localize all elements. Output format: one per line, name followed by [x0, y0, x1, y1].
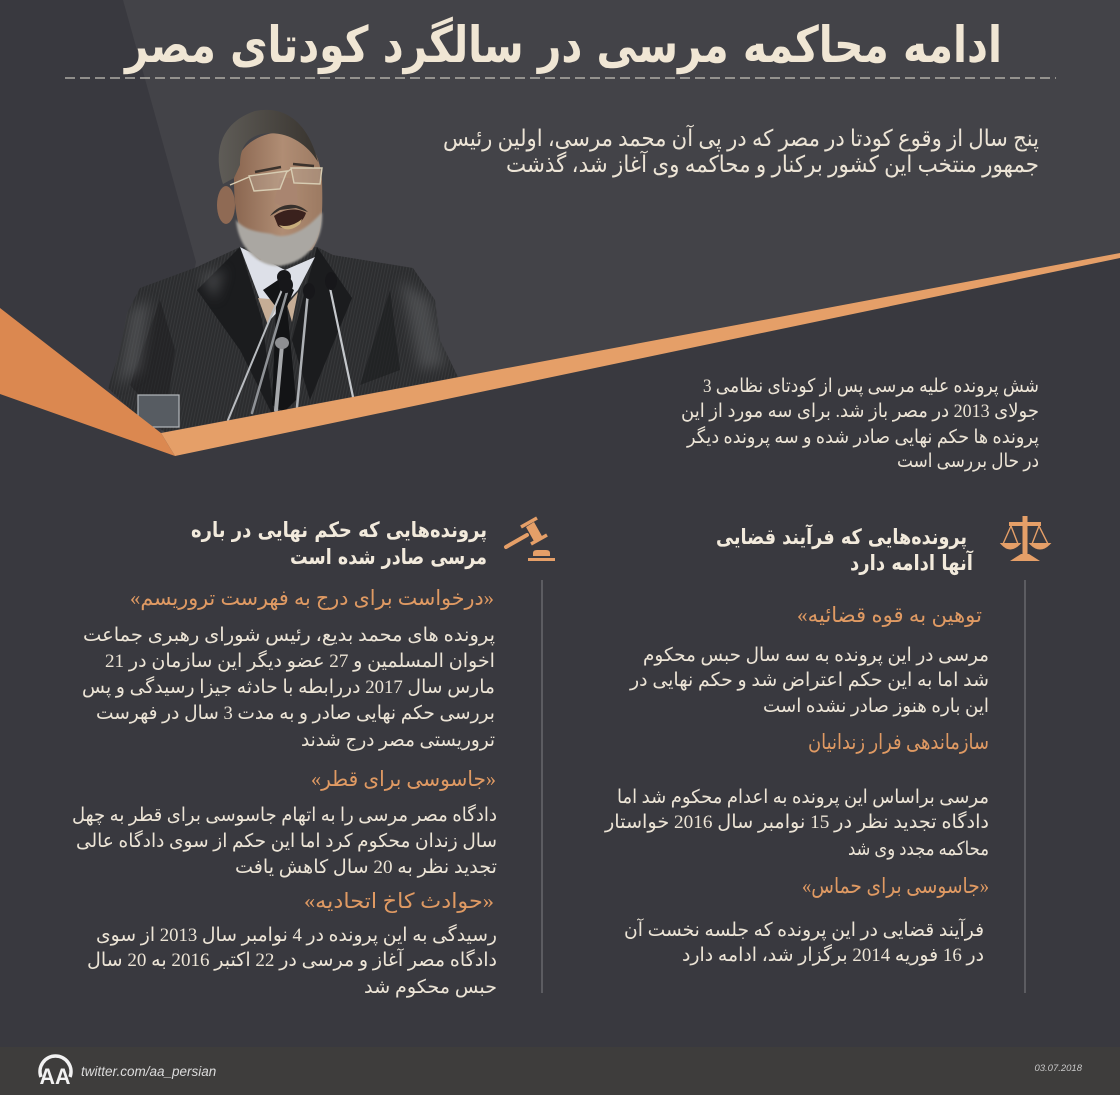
case: terrorism list: «درخواست برای درج به فهرست تروریسم» — [130, 586, 494, 611]
twitter handle: twitter.com/aa_persian — [81, 1064, 216, 1079]
case: insulting judiciary — [629, 603, 989, 717]
right column heading: آنها ادامه دارد — [850, 550, 974, 575]
mouth — [274, 210, 306, 228]
case: palace events: رسیدگی به این پرونده در 4 نوامبر سال 2013 از سوی — [96, 923, 497, 946]
intro text: پنج سال از وقوع کودتا در مصر که در پی آن محمد مرسی، اولین رئیس — [443, 124, 1039, 152]
case: palace events — [87, 889, 497, 998]
case: spying for Qatar: سال زندان محکوم کرد اما این حکم از سوی دادگاه عالی — [76, 829, 497, 852]
nose shadow — [274, 178, 298, 208]
hair — [219, 110, 318, 184]
left column: finalized cases — [72, 586, 497, 998]
glasses — [230, 168, 322, 191]
microphone heads — [275, 270, 337, 349]
summary text: جولای 2013 در مصر باز شد. برای سه مورد از این — [681, 401, 1039, 422]
orange left wedge — [0, 308, 175, 456]
intro text: جمهور منتخب این کشور برکنار و محاکمه وی آغاز شد، گذشت — [506, 150, 1039, 178]
case: spying for Hamas: فرآیند قضایی در این پرونده که جلسه نخست آن — [624, 917, 984, 941]
date: 03.07.2018 — [1034, 1063, 1083, 1074]
case: palace events: «حوادث کاخ اتحادیه» — [304, 889, 494, 913]
eyebrows — [255, 164, 314, 172]
case: insulting judiciary: شد اما به این حکم اعتراض شد و حکم نهایی در — [629, 670, 989, 691]
case: terrorism list: اخوان المسلمین و 27 عضو دیگر این سازمان در 21 — [105, 649, 495, 672]
right column heading — [716, 524, 974, 575]
summary text: شش پرونده علیه مرسی پس از کودتای نظامی 3 — [703, 376, 1039, 397]
icon: gavel — [506, 518, 555, 561]
left column heading — [191, 518, 487, 569]
case: terrorism list: مارس سال 2017 دررابطه با حادثه جیزا رسیدگی و پس — [82, 675, 495, 698]
case: spying for Qatar: تجدید نظر به 20 سال کاهش یافت — [235, 857, 497, 878]
beard — [236, 212, 322, 266]
intro text — [443, 124, 1039, 178]
suit highlights — [118, 270, 445, 385]
case: prison escape: مرسی براساس این پرونده به اعدام محکوم شد اما — [617, 787, 989, 808]
shirt — [240, 247, 315, 320]
summary text: در حال بررسی است — [897, 451, 1039, 472]
right column: ongoing cases — [604, 603, 989, 966]
tie — [263, 280, 296, 412]
suit lapels — [130, 247, 400, 425]
ear — [217, 186, 235, 224]
footer bar — [0, 1047, 1120, 1095]
case: insulting judiciary: مرسی در این پرونده به سه سال حبس محکوم — [643, 645, 989, 666]
case: terrorism list: تروریستی مصر درج شدند — [301, 730, 495, 751]
case: spying for Hamas — [624, 874, 989, 966]
case: prison escape: دادگاه تجدید نظر در 15 نوامبر سال 2016 خواستار — [604, 810, 989, 833]
moustache — [270, 205, 308, 216]
right column heading: پرونده‌هایی که فرآیند قضایی — [716, 524, 967, 549]
case: spying for Qatar — [72, 767, 497, 878]
case: spying for Qatar: «جاسوسی برای قطر» — [311, 767, 496, 791]
case: prison escape: سازماندهی فرار زندانیان — [808, 730, 989, 754]
case: prison escape — [604, 730, 989, 860]
case: spying for Qatar: دادگاه مصر مرسی را به اتهام جاسوسی برای قطر به چهل — [72, 803, 497, 826]
lower shirt — [258, 298, 280, 325]
summary text: پرونده ها حکم نهایی صادر شده و سه پرونده دیگر — [686, 425, 1039, 448]
case: spying for Hamas: «جاسوسی برای حماس» — [802, 874, 989, 898]
orange strip — [161, 253, 1120, 456]
neck and face — [234, 132, 322, 260]
case: palace events: حبس محکوم شد — [364, 977, 497, 998]
summary text — [681, 376, 1039, 472]
left column heading: پرونده‌هایی که حکم نهایی در باره — [191, 518, 487, 542]
case: palace events: دادگاه مصر آغاز و مرسی در 22 اکتبر 2016 به 20 سال — [87, 947, 497, 971]
case: terrorism list — [82, 586, 495, 751]
case: insulting judiciary: توهین به قوه قضائیه» — [797, 603, 982, 627]
case: terrorism list: بررسی حکم نهایی صادر و به مدت 3 سال در فهرست — [96, 703, 495, 724]
left column heading: مرسی صادر شده است — [290, 545, 487, 569]
case: spying for Hamas: در 16 فوریه 2014 برگزار شد، ادامه دارد — [682, 943, 984, 966]
case: terrorism list: پرونده های محمد بدیع، رئیس شورای رهبری جماعت — [83, 625, 495, 646]
upper light panel — [123, 0, 1120, 433]
microphones — [228, 285, 353, 420]
case: prison escape: محاکمه مجدد وی شد — [848, 839, 989, 860]
suit — [108, 247, 458, 432]
icon: scales — [1002, 516, 1049, 561]
case: insulting judiciary: این باره هنوز صادر نشده است — [763, 696, 989, 717]
water glass — [138, 395, 179, 427]
icon: AA logo: AA — [40, 1064, 71, 1089]
photo: speaker at podium — [108, 110, 458, 432]
